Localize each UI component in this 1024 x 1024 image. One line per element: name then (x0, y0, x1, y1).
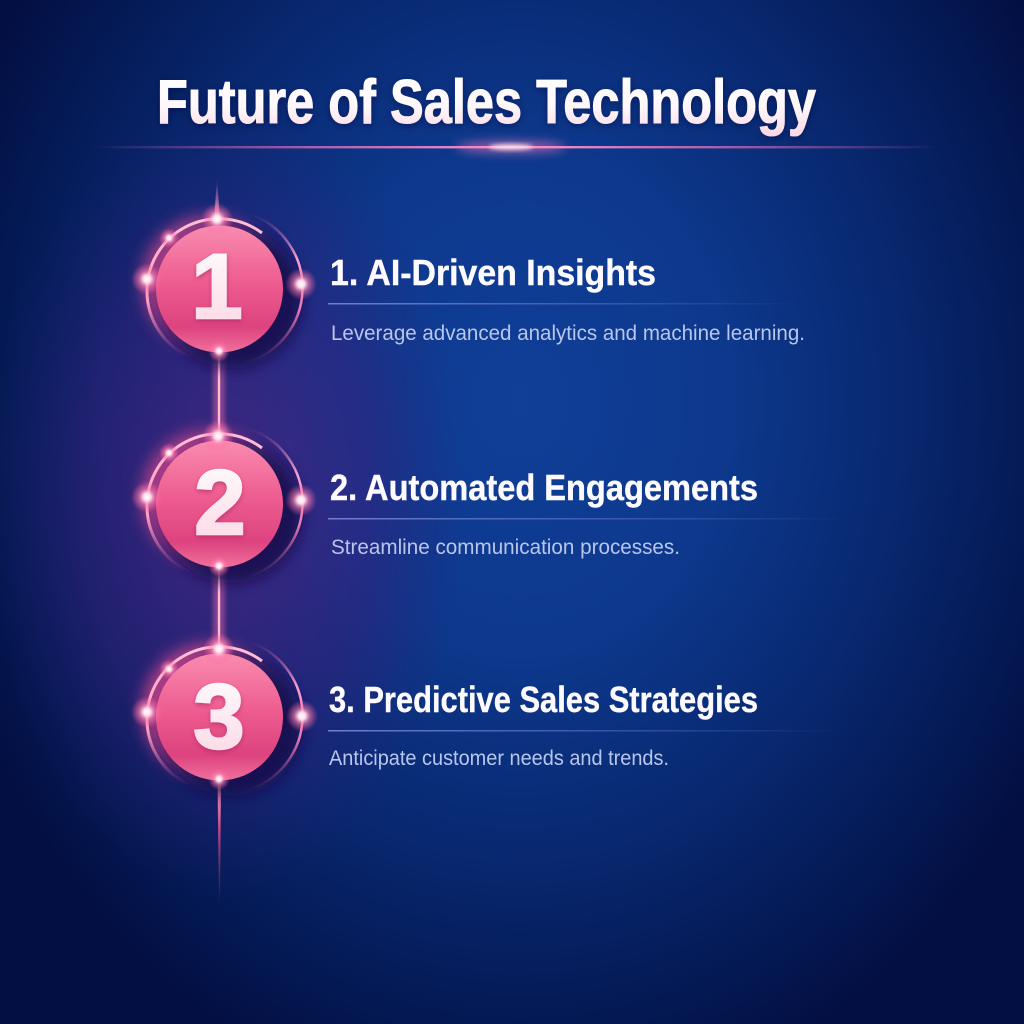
step 2 text: Streamline communication processes. (331, 536, 680, 559)
top flare above 1 (214, 178, 220, 220)
title underline glow (90, 141, 940, 153)
step 2 text (328, 467, 848, 559)
step 2 badge (131, 420, 317, 583)
step 1 text: 1. AI-Driven Insights (330, 252, 656, 293)
step 1 text: Leverage advanced analytics and machine learning. (331, 322, 805, 345)
title: Future of Sales Technology (157, 68, 816, 137)
step 3 text: 3. Predictive Sales Strategies (329, 679, 758, 720)
step 1 badge: 1 (191, 236, 243, 338)
step 2 badge: 2 (194, 452, 246, 554)
connector: tail below 3 (218, 780, 221, 905)
step 2 text: 2. Automated Engagements (330, 467, 758, 508)
step 1 badge (131, 203, 317, 368)
step 1 text (328, 252, 805, 345)
step 3 text (328, 679, 838, 770)
connector: 1 to 2 (213, 352, 225, 438)
connector: 2 to 3 (213, 566, 225, 652)
step 3 badge (131, 633, 318, 796)
step 3 text: Anticipate customer needs and trends. (329, 747, 669, 770)
step 3 badge: 3 (193, 666, 245, 768)
